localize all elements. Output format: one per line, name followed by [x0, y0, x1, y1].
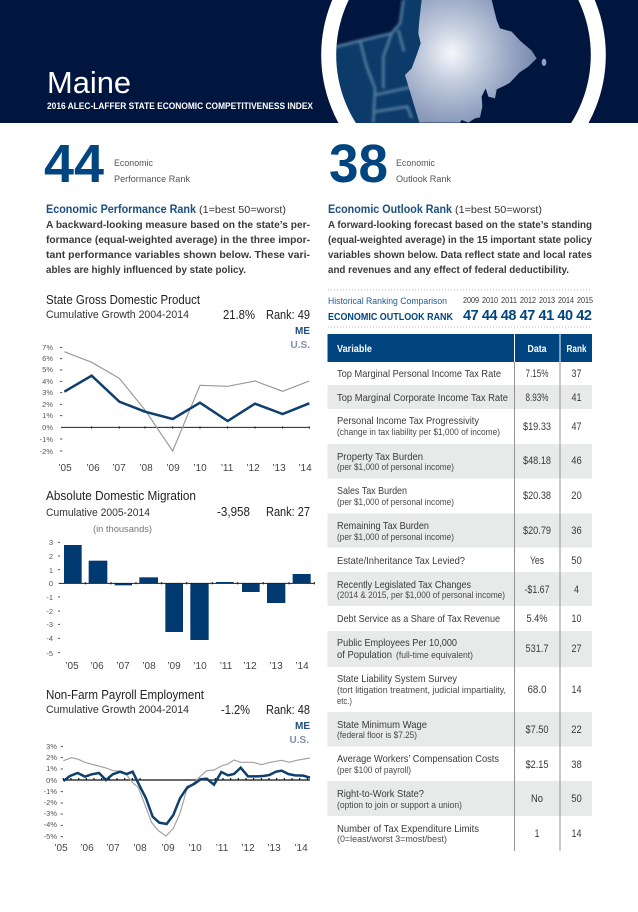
panel: non-farm payroll employment: Cumulative Growth 2004-2014: [46, 704, 189, 716]
rank column: 10: [572, 613, 582, 625]
panel: absolute domestic migration: (in thousands): [93, 524, 152, 535]
row labels: Debt Service as a Share of Tax Revenue: [337, 613, 500, 625]
line chart: payroll employment: ’05: [54, 843, 68, 854]
row labels: (2014 & 2015, per $1,000 of personal income): [337, 590, 505, 600]
bar chart: migration: -4: [46, 634, 53, 643]
bar chart: migration: -2: [46, 607, 53, 616]
text block: outlook rank description: (1=best 50=worst): [455, 204, 542, 216]
bar chart: migration: 1: [49, 566, 53, 575]
bar chart: migration: -5: [46, 649, 53, 658]
data column: No: [531, 793, 543, 805]
data column: $7.50: [526, 724, 548, 736]
bar chart: migration: ’12: [243, 661, 257, 672]
row labels: State Minimum Wage: [337, 719, 427, 731]
bar chart: migration: ’05: [65, 661, 79, 672]
data column: [523, 368, 551, 840]
panel: state gross domestic product: U.S.: [291, 340, 310, 351]
rank column: 47: [572, 421, 582, 433]
line chart: GDP growth: ’07: [112, 463, 126, 474]
text block: performance rank description: A backward-looking measure based on the state’s per-: [46, 219, 310, 231]
row labels: Remaining Tax Burden: [337, 520, 429, 532]
table header: Rank: [566, 343, 587, 355]
line chart: payroll employment: ’13: [267, 843, 281, 854]
line chart: payroll employment: ’12: [241, 843, 255, 854]
row labels: (federal floor is $7.25): [337, 730, 417, 740]
panel: historical ranking comparison: 2012: [520, 296, 536, 305]
data column: $2.15: [526, 759, 548, 771]
data column: 7.15%: [526, 368, 549, 380]
text block: performance rank description: formance (equal-weighted average) in the three impor-: [46, 234, 310, 246]
panel: state gross domestic product: ME: [295, 326, 310, 337]
bar chart: migration: ’09: [167, 661, 181, 672]
line chart: GDP growth: 1%: [42, 411, 53, 420]
row labels: Top Marginal Personal Income Tax Rate: [337, 368, 501, 380]
text block: outlook rank description: variables shown below. Data reflect state and local rates: [328, 249, 592, 261]
panel: non-farm payroll employment: Non-Farm Payroll Employment: [46, 687, 204, 702]
rank: economic outlook: [329, 134, 451, 194]
bar chart: migration: ’07: [116, 661, 130, 672]
bar chart: migration: 0: [49, 579, 53, 588]
text block: outlook rank description: A forward-looking forecast based on the state’s standing: [328, 219, 592, 231]
line chart: payroll employment: -1%: [44, 787, 57, 796]
line chart: GDP growth: -2%: [40, 447, 53, 456]
line chart: GDP growth: 7%: [42, 343, 53, 352]
text block: outlook rank description: [328, 202, 592, 276]
bar chart: migration: 3: [49, 538, 53, 547]
row labels: Top Marginal Corporate Income Tax Rate: [337, 392, 508, 404]
rank column: 38: [571, 759, 582, 771]
bar chart: migration: ’14: [295, 661, 309, 672]
text block: performance rank description: tant performance variables shown below. These vari-: [46, 249, 310, 261]
rank column: 22: [571, 724, 582, 736]
text block: performance rank description: ables are highly influenced by state policy.: [46, 264, 246, 276]
table header: Data: [528, 343, 547, 355]
panel: historical ranking comparison: 47 44 48 47 41 40 42: [463, 308, 592, 324]
line chart: GDP growth: 0%: [42, 423, 53, 432]
rank column: 14: [572, 828, 582, 840]
line chart: payroll employment: 0%: [46, 776, 57, 785]
bar chart: migration: ’06: [90, 661, 104, 672]
row labels: (per $1,000 of personal income): [337, 462, 454, 472]
data column: 531.7: [526, 643, 548, 655]
data column: $19.33: [523, 421, 551, 433]
row labels: Recently Legislated Tax Changes: [337, 579, 471, 591]
rank column: 50: [571, 555, 582, 567]
panel: non-farm payroll employment: U.S.: [290, 735, 309, 746]
line chart: GDP growth: 3%: [42, 388, 53, 397]
line chart: payroll employment: 1%: [46, 764, 57, 773]
rank: economic outlook: Outlook Rank: [396, 174, 451, 185]
panel: absolute domestic migration: Cumulative 2005-2014: [46, 507, 150, 519]
text block: outlook rank description: and revenues and any effect of federal deductibility.: [328, 264, 569, 276]
row labels: Average Workers’ Compensation Costs: [337, 753, 499, 765]
panel: historical ranking comparison: Historical Ranking Comparison: [328, 296, 447, 307]
rank column: 27: [572, 643, 582, 655]
line chart: payroll employment: 2%: [46, 753, 57, 762]
rank: economic outlook: 38: [329, 134, 388, 194]
row labels: etc.): [337, 696, 352, 706]
line chart: payroll employment: -2%: [44, 798, 57, 807]
line chart: GDP growth: ’08: [139, 463, 153, 474]
panel: non-farm payroll employment: ME: [295, 721, 310, 732]
panel: historical ranking comparison: [328, 290, 593, 327]
row labels: (option to join or support a union): [337, 800, 462, 810]
panel: state gross domestic product: 21.8%: [223, 308, 255, 322]
data column: 68.0: [528, 684, 546, 696]
line chart: GDP growth: -1%: [40, 435, 53, 444]
panel: historical ranking comparison: ECONOMIC OUTLOOK RANK: [328, 311, 453, 323]
rank column: 37: [572, 368, 582, 380]
panel: historical ranking comparison: 2011: [501, 296, 518, 305]
panel: non-farm payroll employment: -1.2%: [221, 703, 250, 717]
row labels: of Population: [337, 649, 392, 661]
bar chart: migration: ’13: [269, 661, 283, 672]
panel: non-farm payroll employment: [44, 687, 310, 854]
row labels: Number of Tax Expenditure Limits: [337, 823, 479, 835]
text block: outlook rank description: (equal-weighted average) in the 15 important state policy: [328, 234, 592, 246]
rank column: 36: [571, 525, 582, 537]
data column: Yes: [530, 555, 544, 567]
line chart: payroll employment: ’08: [133, 843, 147, 854]
line chart: GDP growth: 4%: [42, 377, 53, 386]
line chart: payroll employment: ’14: [294, 843, 308, 854]
row labels: (change in tax liability per $1,000 of income): [337, 427, 500, 437]
line chart: payroll employment: -5%: [44, 832, 57, 841]
data column: $48.18: [523, 455, 551, 467]
data column: 1: [534, 828, 540, 840]
line chart: GDP growth: ’05: [58, 463, 72, 474]
row labels: Public Employees Per 10,000: [337, 637, 457, 649]
line chart: payroll employment: ’06: [80, 843, 94, 854]
panel: historical ranking comparison: 2014: [558, 296, 574, 305]
panel: non-farm payroll employment: Rank: 48: [266, 703, 310, 717]
rank column: 14: [572, 684, 582, 696]
text block: performance rank description: Economic Performance Rank: [46, 202, 196, 216]
line chart: payroll employment: ’10: [188, 843, 202, 854]
data column: $20.38: [523, 490, 551, 502]
line chart: payroll employment: -3%: [44, 809, 57, 818]
line chart: GDP growth: 5%: [42, 365, 53, 374]
line chart: payroll employment: [44, 742, 310, 854]
line chart: GDP growth: ’13: [272, 463, 286, 474]
line chart: payroll employment: -4%: [44, 820, 57, 829]
text block: performance rank description: (1=best 50=worst): [199, 204, 286, 216]
rank column: [571, 368, 582, 840]
table: outlook variables: [328, 334, 592, 851]
row labels: State Liability System Survey: [337, 673, 458, 685]
line chart: GDP growth: ’14: [298, 463, 312, 474]
rank: economic performance: Performance Rank: [114, 174, 190, 185]
bar chart: migration: -3: [46, 620, 53, 629]
data column: 8.93%: [526, 392, 549, 404]
line chart: GDP growth: ’09: [166, 463, 180, 474]
panel: absolute domestic migration: -3,958: [217, 505, 250, 519]
data column: 5.4%: [526, 613, 548, 625]
row labels: Estate/Inheritance Tax Levied?: [337, 555, 465, 567]
icon: state map in circle: [321, 0, 606, 123]
rank: economic outlook: Economic: [396, 158, 435, 169]
rank column: 4: [574, 584, 579, 596]
line chart: payroll employment: ’11: [216, 843, 229, 854]
bar chart: migration: ’10: [193, 661, 207, 672]
panel: state gross domestic product: Cumulative Growth 2004-2014: [46, 309, 189, 321]
bar chart: migration: ’11: [220, 661, 233, 672]
text block: performance rank description: [46, 202, 310, 276]
table header: [337, 343, 587, 355]
header banner: [0, 0, 638, 123]
data column: $20.79: [523, 525, 551, 537]
text block: outlook rank description: Economic Outlook Rank: [328, 202, 452, 216]
panel: state gross domestic product: Rank: 49: [266, 308, 310, 322]
line chart: payroll employment: ’07: [106, 843, 120, 854]
line chart: payroll employment: 3%: [46, 742, 57, 751]
bar chart: migration: ’08: [142, 661, 156, 672]
rank column: 41: [572, 392, 582, 404]
panel: historical ranking comparison: 2010: [482, 296, 498, 305]
line chart: GDP growth: 2%: [42, 400, 53, 409]
row labels: (tort litigation treatment, judicial impartiality,: [337, 685, 506, 695]
row labels: [337, 368, 508, 844]
panel: absolute domestic migration: Absolute Domestic Migration: [46, 488, 196, 503]
row labels: Personal Income Tax Progressivity: [337, 415, 480, 427]
row labels: (0=least/worst 3=most/best): [337, 834, 447, 844]
row labels: (full-time equivalent): [396, 650, 473, 660]
rank: economic performance: [44, 134, 190, 194]
panel: absolute domestic migration: Rank: 27: [266, 505, 310, 519]
panel: state gross domestic product: [40, 292, 312, 474]
line chart: GDP growth: ’11: [221, 463, 234, 474]
rank column: 46: [571, 455, 582, 467]
line chart: GDP growth: 6%: [42, 354, 53, 363]
row labels: (per $100 of payroll): [337, 765, 411, 775]
table header: Variable: [337, 343, 372, 355]
rank column: 50: [571, 793, 582, 805]
bar chart: migration: [46, 538, 314, 672]
panel: absolute domestic migration: [46, 488, 314, 672]
panel: historical ranking comparison: 2015: [577, 296, 593, 305]
line chart: GDP growth: ’10: [193, 463, 207, 474]
row labels: Property Tax Burden: [337, 451, 423, 463]
line chart: GDP growth: ’06: [86, 463, 100, 474]
row labels: Sales Tax Burden: [337, 485, 407, 497]
rank: economic performance: 44: [44, 134, 104, 194]
panel: historical ranking comparison: 2013: [539, 296, 555, 305]
line chart: payroll employment: ’09: [161, 843, 175, 854]
data column: -$1.67: [524, 584, 550, 596]
bar chart: migration: 2: [49, 552, 53, 561]
rank: economic performance: Economic: [114, 158, 153, 169]
row labels: Right-to-Work State?: [337, 788, 424, 800]
rank column: 20: [571, 490, 582, 502]
bar chart: migration: -1: [46, 593, 53, 602]
line chart: GDP growth: ’12: [246, 463, 260, 474]
row labels: (per $1,000 of personal income): [337, 532, 454, 542]
panel: historical ranking comparison: 2009: [463, 296, 479, 305]
index subtitle: 2016 ALEC-LAFFER STATE ECONOMIC COMPETITIVENESS INDEX: [47, 101, 314, 112]
panel: state gross domestic product: State Gross Domestic Product: [46, 292, 200, 307]
row labels: (per $1,000 of personal income): [337, 497, 454, 507]
state name: Maine: [47, 65, 131, 100]
line chart: GDP growth: [40, 343, 312, 474]
